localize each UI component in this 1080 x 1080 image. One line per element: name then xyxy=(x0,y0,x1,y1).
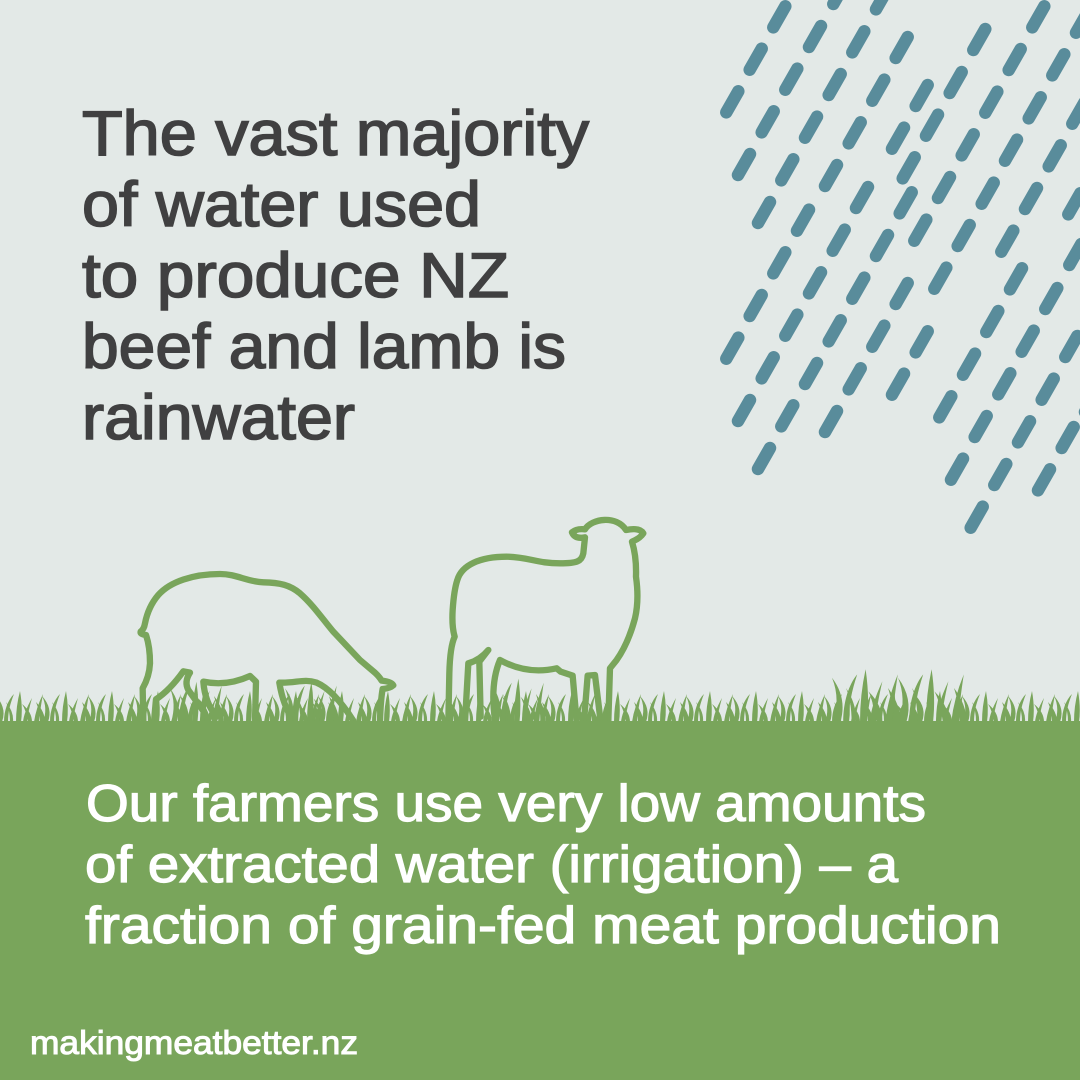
supporting statement: Our farmers use very low amounts xyxy=(86,775,926,833)
grass xyxy=(0,669,1080,722)
rain dashes xyxy=(726,0,1080,528)
supporting statement xyxy=(85,775,1001,955)
icon: standing sheep xyxy=(448,520,643,722)
title: The vast majority xyxy=(82,99,590,169)
supporting statement: fraction of grain-fed meat production xyxy=(85,897,1001,955)
title: to produce NZ xyxy=(82,241,509,311)
title: of water used xyxy=(82,170,481,240)
supporting statement: of extracted water (irrigation) – a xyxy=(85,836,898,894)
icon: grazing sheep xyxy=(141,574,393,722)
title xyxy=(82,99,590,453)
website url: makingmeatbetter.nz xyxy=(30,1024,358,1061)
title: rainwater xyxy=(82,383,355,453)
title: beef and lamb is xyxy=(82,312,566,382)
green ground panel xyxy=(0,721,1080,1080)
